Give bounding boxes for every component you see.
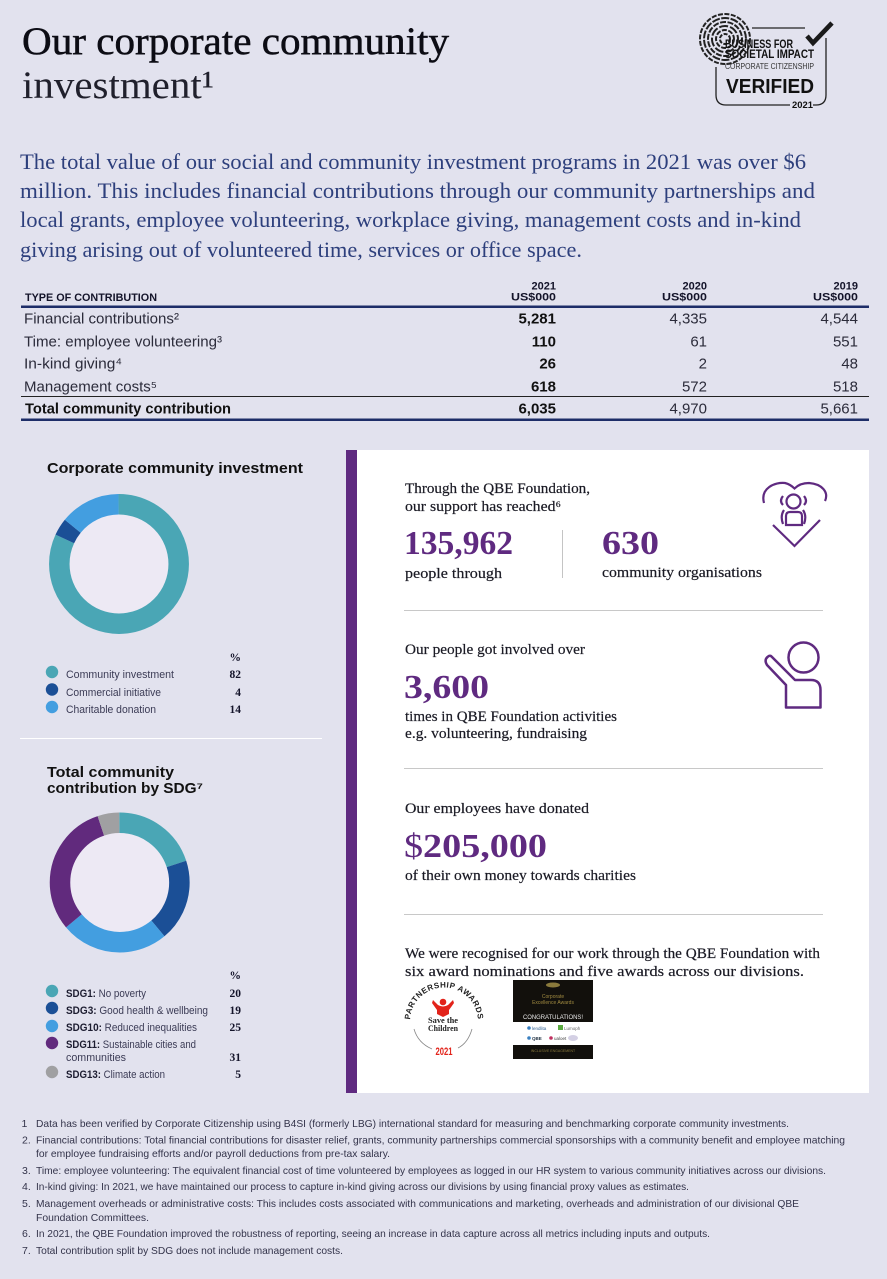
badge: partnership awards: 2021 [436, 1046, 452, 1058]
row: employee volunteering: Time: employee volunteering³ [24, 334, 222, 350]
stat: people [404, 525, 513, 582]
donut chart: corporate community investment [59, 504, 179, 624]
text: people involved: Our people got involved over [405, 642, 585, 658]
legend: SDG: SDG1: No poverty [66, 988, 146, 1000]
row: total: 6,035 [518, 400, 556, 418]
text: activities [405, 709, 617, 742]
intro paragraph [20, 149, 815, 262]
heading: total community contribution by SDG [47, 764, 203, 797]
stat: people: people through [405, 566, 503, 582]
row: management costs: 618 [531, 378, 556, 396]
table header: 2021 [532, 280, 556, 292]
verified badge: BUSINESS FOR [725, 39, 794, 51]
title [22, 20, 450, 107]
legend: SDG: 25 [230, 1022, 241, 1034]
heading: total community contribution by SDG: contribution by SDG⁷ [47, 780, 203, 797]
footnotes: Total contribution split by SDG does not include management costs. [36, 1245, 343, 1257]
intro paragraph: local grants, employee volunteering, workplace giving, management costs and in-kind [20, 207, 801, 232]
row: financial contributions: 5,281 [518, 310, 556, 328]
stat: community organisations: community organisations [602, 565, 762, 581]
badge: partnership awards: Save the [428, 1016, 458, 1025]
legend: corporate community investment: % [230, 652, 241, 664]
table header [25, 280, 858, 304]
row: total: 4,970 [669, 400, 707, 418]
intro paragraph: The total value of our social and community investment programs in 2021 was over $6 [20, 149, 806, 174]
footnotes: 2. [22, 1134, 31, 1146]
text: recognition [405, 946, 821, 980]
row: financial contributions: 4,544 [820, 310, 858, 328]
row: in-kind giving: 26 [539, 356, 556, 372]
footnotes: In 2021, the QBE Foundation improved the robustness of reporting, seeing an increase in data capture across all metrics including inputs and outputs. [36, 1228, 710, 1240]
title: Our corporate community [22, 20, 450, 63]
legend: corporate community investment [46, 652, 241, 716]
row: total: Total community contribution [25, 400, 231, 418]
heading: corporate community investment: Corporate community investment [47, 460, 303, 477]
verified badge: CORPORATE CITIZENSHIP [725, 62, 814, 71]
badge: corporate excellence awards: ualoet [554, 1036, 567, 1041]
stat: community organisations: 630 [602, 525, 659, 562]
footnotes: Time: employee volunteering: The equivalent financial cost of time volunteered by employees as logged in our HR system to various community initiatives across our divisions. [36, 1165, 826, 1177]
verified badge: 2021 [792, 100, 814, 111]
row: management costs: 572 [682, 378, 707, 396]
text: recognition: We were recognised for our work through the QBE Foundation with [405, 946, 821, 962]
table header: US$000 [813, 292, 858, 304]
footnotes: 6. [22, 1228, 31, 1240]
footnotes: Financial contributions: Total financial contributions for disaster relief, grants, community partnerships commercial sponsorships with a community benefit and employee matching [36, 1134, 845, 1146]
legend: SDG: 31 [230, 1052, 241, 1064]
row: management costs: Management costs⁵ [24, 378, 157, 396]
footnotes: In-kind giving: In 2021, we have maintained our process to capture in-kind giving across our divisions by using financial proxy values as estimates. [36, 1181, 689, 1193]
text: support reached: our support has reached⁶ [405, 499, 561, 515]
footnotes: 1 [22, 1118, 28, 1130]
badge: corporate excellence awards [513, 980, 593, 1059]
legend: SDG: % [230, 970, 241, 982]
legend: SDG: 19 [230, 1005, 241, 1017]
row: financial contributions [24, 310, 858, 328]
footnotes: Data has been verified by Corporate Citizenship using B4SI (formerly LBG) international standard for measuring and benchmarking corporate community investments. [36, 1118, 789, 1130]
footnotes [22, 1118, 845, 1257]
table header: US$000 [662, 292, 707, 304]
badge: corporate excellence awards: INCLUSIVE ENGAGEMENT [531, 1049, 576, 1053]
text: support reached [405, 481, 590, 515]
panel: QBE Foundation impact [346, 450, 869, 1093]
row: employee volunteering [24, 334, 858, 350]
row: financial contributions: 4,335 [669, 310, 707, 328]
legend: corporate community investment: Community investment [66, 669, 174, 681]
badge: corporate excellence awards: QBE [532, 1036, 542, 1041]
table header: TYPE OF CONTRIBUTION [25, 292, 157, 304]
title: investment¹ [22, 64, 214, 107]
footnotes: 3. [22, 1165, 31, 1177]
stat: 3,600: 3,600 [404, 669, 489, 706]
text: support reached: Through the QBE Foundation, [405, 481, 590, 497]
row: financial contributions: Financial contributions² [24, 310, 179, 328]
footnotes: Management overheads or administrative costs: This includes costs associated with communications and marketing, overheads and administration of our divisional QBE [36, 1198, 799, 1210]
verified badge: SOCIETAL IMPACT [725, 49, 814, 61]
icon: heart with people [763, 483, 826, 546]
table header: US$000 [511, 292, 556, 304]
badge: corporate excellence awards: Corporate [542, 994, 564, 1000]
icon: person raising hand [766, 642, 820, 708]
legend: SDG [46, 970, 241, 1081]
row: total: 5,661 [820, 400, 858, 418]
table header: 2019 [834, 280, 858, 292]
badge: corporate excellence awards: Lumoph [564, 1026, 581, 1031]
legend: SDG: communities [66, 1052, 126, 1064]
heading: total community contribution by SDG: Total community [47, 764, 175, 781]
row: in-kind giving: 2 [699, 356, 707, 372]
text: own money: of their own money towards charities [405, 868, 636, 884]
text: recognition: six award nominations and five awards across our divisions. [405, 964, 804, 980]
badge: partnership awards: Children [428, 1024, 459, 1033]
legend: SDG: SDG10: Reduced inequalities [66, 1022, 197, 1034]
row: total [25, 400, 858, 418]
row: in-kind giving: 48 [841, 356, 858, 372]
verified badge [700, 14, 832, 111]
badge: partnership awards: PARTNERSHIP AWARDS [404, 982, 484, 1020]
donut chart: contribution by SDG [60, 823, 179, 942]
stat: people: 135,962 [404, 525, 513, 562]
row: management costs [24, 378, 858, 396]
legend: SDG: SDG11: Sustainable cities and [66, 1039, 196, 1051]
legend: corporate community investment: 4 [235, 687, 241, 699]
footnotes: 5. [22, 1198, 31, 1210]
row: management costs: 518 [833, 378, 858, 396]
footnotes: 4. [22, 1181, 31, 1193]
legend: SDG: 5 [235, 1069, 241, 1081]
row: in-kind giving: In-kind giving⁴ [24, 356, 122, 372]
badge: corporate excellence awards: Excellence Awards [532, 1000, 574, 1006]
legend: SDG: 20 [230, 988, 241, 1000]
stat: community organisations [602, 525, 762, 581]
text: activities: e.g. volunteering, fundraising [405, 726, 587, 742]
row: employee volunteering: 110 [532, 334, 556, 350]
footnotes: 7. [22, 1245, 31, 1257]
badge: corporate excellence awards: lendlita [532, 1026, 547, 1031]
legend: corporate community investment: 14 [230, 704, 241, 716]
row: in-kind giving [24, 356, 858, 372]
legend: corporate community investment: 82 [230, 669, 241, 681]
row: employee volunteering: 551 [833, 334, 858, 350]
contribution table [21, 280, 869, 421]
legend: SDG: SDG13: Climate action [66, 1069, 165, 1081]
stat: $205,000: $205,000 [404, 828, 547, 865]
footnotes: for employee fundraising efforts and/or payroll deductions from pre-tax salary. [36, 1148, 390, 1160]
legend: SDG: SDG3: Good health & wellbeing [66, 1005, 208, 1017]
footnotes: Foundation Committees. [36, 1212, 149, 1224]
badge: partnership awards [404, 982, 484, 1058]
intro paragraph: million. This includes financial contributions through our community partnerships and [20, 178, 815, 203]
row: employee volunteering: 61 [690, 334, 707, 350]
table header: 2020 [683, 280, 707, 292]
text: activities: times in QBE Foundation activities [405, 709, 617, 725]
text: employees donated: Our employees have donated [405, 801, 590, 817]
legend: corporate community investment: Charitable donation [66, 704, 156, 716]
intro paragraph: giving arising out of volunteered time, services or office space. [20, 237, 582, 262]
verified badge: VERIFIED [726, 75, 814, 98]
badge: corporate excellence awards: CONGRATULATIONS! [523, 1014, 583, 1021]
legend: corporate community investment: Commercial initiative [66, 687, 161, 699]
